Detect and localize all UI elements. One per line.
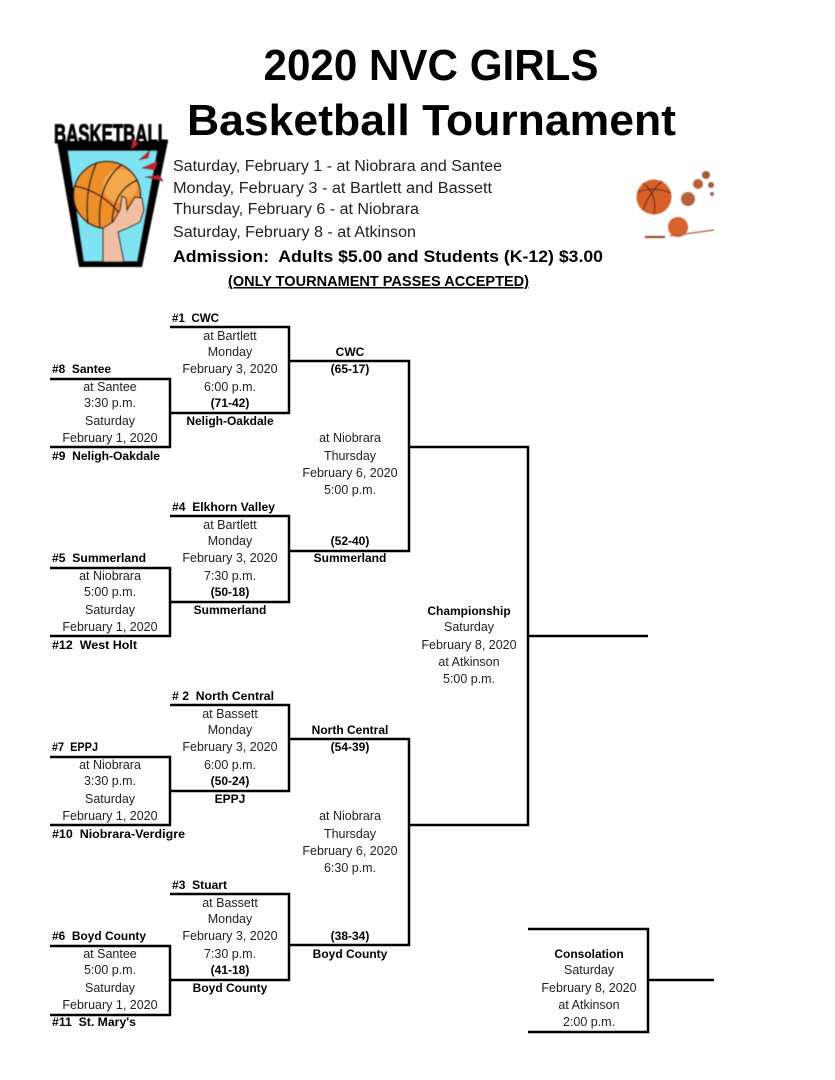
bracket: quarterfinal match CWC vs Neligh-Oakdale: (71-42) bbox=[211, 396, 249, 410]
bracket: quarterfinal match Stuart vs Boyd County: February 3, 2020 bbox=[182, 929, 278, 943]
bracket: quarterfinal match North Central vs EPPJ: 6:00 p.m. bbox=[204, 758, 256, 772]
bracket: first round match Santee vs Neligh-Oakdale: at Santee bbox=[83, 380, 137, 394]
bracket: championship: Championship bbox=[427, 604, 511, 618]
schedule text: Thursday, February 6 - at Niobrara bbox=[173, 201, 419, 218]
bracket: quarterfinal match CWC vs Neligh-Oakdale bbox=[170, 311, 289, 428]
bracket: semifinal North Central vs Boyd County: Thursday bbox=[324, 827, 377, 841]
bracket: quarterfinal match Elkhorn Valley vs Summerland: Monday bbox=[208, 534, 253, 548]
bracket: first round match EPPJ vs Niobrara-Verdigre bbox=[50, 740, 185, 841]
bracket: championship: February 8, 2020 bbox=[421, 638, 517, 652]
bracket: championship: Saturday bbox=[444, 620, 495, 634]
bracket: semifinal North Central vs Boyd County: North Central bbox=[312, 723, 388, 737]
icon: bouncing basketballs bbox=[636, 171, 714, 237]
bracket: quarterfinal match CWC vs Neligh-Oakdale: #1 CWC bbox=[172, 311, 219, 325]
bracket: semifinal CWC vs Summerland: CWC bbox=[336, 345, 365, 359]
bracket: quarterfinal match North Central vs EPPJ: (50-24) bbox=[211, 774, 249, 788]
bracket: semifinal North Central vs Boyd County: (38-34) bbox=[331, 929, 369, 943]
bracket: first round match Summerland vs West Holt: #12 West Holt bbox=[52, 638, 137, 652]
bracket: quarterfinal match North Central vs EPPJ: Monday bbox=[208, 723, 253, 737]
bracket: quarterfinal match North Central vs EPPJ bbox=[170, 689, 289, 806]
bracket: quarterfinal match CWC vs Neligh-Oakdale: February 3, 2020 bbox=[182, 362, 278, 376]
bracket: quarterfinal match Stuart vs Boyd County: 7:30 p.m. bbox=[204, 947, 256, 961]
bracket: first round match Santee vs Neligh-Oakdale: #9 Neligh-Oakdale bbox=[52, 449, 160, 463]
bracket: first round match Boyd County vs St. Mary's: February 1, 2020 bbox=[62, 998, 158, 1012]
bracket: first round match EPPJ vs Niobrara-Verdigre: Saturday bbox=[85, 792, 136, 806]
bracket: quarterfinal match CWC vs Neligh-Oakdale: Neligh-Oakdale bbox=[186, 414, 274, 428]
bracket: consolation: at Atkinson bbox=[558, 998, 620, 1012]
bracket: quarterfinal match Elkhorn Valley vs Summerland: (50-18) bbox=[211, 585, 249, 599]
bracket: semifinal North Central vs Boyd County: 6:30 p.m. bbox=[324, 861, 376, 875]
bracket: semifinal CWC vs Summerland: (52-40) bbox=[331, 534, 369, 548]
admission text: Admission: Adults $5.00 and Students (K-12) $3.00 bbox=[173, 247, 603, 266]
bracket: quarterfinal match Elkhorn Valley vs Summerland: at Bartlett bbox=[203, 518, 257, 532]
bracket: first round match Boyd County vs St. Mary's: #11 St. Mary's bbox=[52, 1015, 136, 1029]
bracket: first round match Summerland vs West Holt: at Niobrara bbox=[79, 569, 141, 583]
icon: basketball logo: BASKETBALL bbox=[54, 119, 168, 149]
bracket: quarterfinal match Elkhorn Valley vs Summerland bbox=[170, 500, 289, 617]
title: 2020 NVC GIRLS bbox=[264, 41, 598, 90]
bracket: first round match Summerland vs West Holt: February 1, 2020 bbox=[62, 620, 158, 634]
bracket: first round match Summerland vs West Holt: 5:00 p.m. bbox=[84, 585, 136, 599]
bracket: first round match EPPJ vs Niobrara-Verdigre: at Niobrara bbox=[79, 758, 141, 772]
bracket: quarterfinal match Stuart vs Boyd County bbox=[170, 878, 289, 995]
bracket: first round match Santee vs Neligh-Oakdale bbox=[50, 362, 170, 463]
title: Basketball Tournament bbox=[187, 96, 676, 145]
bracket: championship: 5:00 p.m. bbox=[443, 672, 495, 686]
schedule text: Saturday, February 8 - at Atkinson bbox=[173, 224, 416, 241]
bracket: quarterfinal match North Central vs EPPJ: # 2 North Central bbox=[172, 689, 274, 703]
bracket: quarterfinal match North Central vs EPPJ: EPPJ bbox=[215, 792, 245, 806]
bracket: semifinal CWC vs Summerland: Summerland bbox=[314, 551, 386, 565]
bracket: first round match Boyd County vs St. Mary's: 5:00 p.m. bbox=[84, 963, 136, 977]
icon: basketball logo bbox=[54, 119, 168, 267]
bracket: championship bbox=[409, 447, 648, 825]
bracket: quarterfinal match Stuart vs Boyd County: at Bassett bbox=[202, 896, 258, 910]
bracket: quarterfinal match North Central vs EPPJ: February 3, 2020 bbox=[182, 740, 278, 754]
bracket: first round match Santee vs Neligh-Oakdale: 3:30 p.m. bbox=[84, 396, 136, 410]
bracket: quarterfinal match North Central vs EPPJ: at Bassett bbox=[202, 707, 258, 721]
bracket: consolation: 2:00 p.m. bbox=[563, 1015, 615, 1029]
bracket: quarterfinal match CWC vs Neligh-Oakdale: at Bartlett bbox=[203, 329, 257, 343]
bracket: first round match EPPJ vs Niobrara-Verdigre: February 1, 2020 bbox=[62, 809, 158, 823]
bracket: first round match EPPJ vs Niobrara-Verdigre: 3:30 p.m. bbox=[84, 774, 136, 788]
bracket: first round match Boyd County vs St. Mary's: at Santee bbox=[83, 947, 137, 961]
bracket: semifinal CWC vs Summerland bbox=[289, 345, 409, 565]
bracket: quarterfinal match Stuart vs Boyd County: Monday bbox=[208, 912, 253, 926]
bracket: consolation: Consolation bbox=[554, 947, 624, 961]
bracket: first round match Santee vs Neligh-Oakdale: February 1, 2020 bbox=[62, 431, 158, 445]
bracket: first round match Summerland vs West Holt: Saturday bbox=[85, 603, 136, 617]
bracket: quarterfinal match Elkhorn Valley vs Summerland: February 3, 2020 bbox=[182, 551, 278, 565]
bracket: consolation bbox=[528, 929, 714, 1032]
bracket: semifinal North Central vs Boyd County: Boyd County bbox=[313, 947, 388, 961]
bracket: championship: at Atkinson bbox=[438, 655, 500, 669]
schedule text bbox=[173, 158, 502, 241]
bracket: semifinal CWC vs Summerland: February 6, 2020 bbox=[302, 466, 398, 480]
bracket: first round match Summerland vs West Holt: #5 Summerland bbox=[52, 551, 146, 565]
passes notice: (ONLY TOURNAMENT PASSES ACCEPTED) bbox=[228, 273, 529, 290]
bracket: first round match Santee vs Neligh-Oakdale: #8 Santee bbox=[52, 362, 111, 376]
bracket: semifinal CWC vs Summerland: Thursday bbox=[324, 449, 377, 463]
bracket: first round match Boyd County vs St. Mary's bbox=[50, 929, 170, 1029]
bracket: first round match EPPJ vs Niobrara-Verdigre: #7 EPPJ bbox=[52, 740, 98, 754]
bracket: quarterfinal match Elkhorn Valley vs Summerland: Summerland bbox=[194, 603, 266, 617]
bracket: quarterfinal match Elkhorn Valley vs Summerland: #4 Elkhorn Valley bbox=[172, 500, 275, 514]
bracket: semifinal CWC vs Summerland: at Niobrara bbox=[319, 431, 381, 445]
bracket: semifinal North Central vs Boyd County: (54-39) bbox=[331, 740, 369, 754]
bracket: consolation: February 8, 2020 bbox=[541, 981, 637, 995]
schedule text: Monday, February 3 - at Bartlett and Bassett bbox=[173, 180, 493, 197]
bracket: semifinal North Central vs Boyd County: February 6, 2020 bbox=[302, 844, 398, 858]
bracket: quarterfinal match CWC vs Neligh-Oakdale: 6:00 p.m. bbox=[204, 380, 256, 394]
bracket: quarterfinal match Stuart vs Boyd County: Boyd County bbox=[193, 981, 268, 995]
bracket: quarterfinal match Stuart vs Boyd County: (41-18) bbox=[211, 963, 249, 977]
bracket: first round match Santee vs Neligh-Oakdale: Saturday bbox=[85, 414, 136, 428]
bracket: first round match Boyd County vs St. Mary's: Saturday bbox=[85, 981, 136, 995]
bracket: consolation: Saturday bbox=[564, 963, 615, 977]
schedule text: Saturday, February 1 - at Niobrara and Santee bbox=[173, 158, 502, 175]
title bbox=[187, 41, 676, 145]
bracket: semifinal CWC vs Summerland: 5:00 p.m. bbox=[324, 483, 376, 497]
bracket: semifinal North Central vs Boyd County: at Niobrara bbox=[319, 809, 381, 823]
bracket: first round match Summerland vs West Holt bbox=[50, 551, 170, 652]
bracket: quarterfinal match Elkhorn Valley vs Summerland: 7:30 p.m. bbox=[204, 569, 256, 583]
bracket: first round match Boyd County vs St. Mary's: #6 Boyd County bbox=[52, 929, 146, 943]
bracket: semifinal CWC vs Summerland: (65-17) bbox=[331, 362, 369, 376]
bracket: quarterfinal match Stuart vs Boyd County: #3 Stuart bbox=[172, 878, 227, 892]
bracket: semifinal North Central vs Boyd County bbox=[289, 723, 409, 961]
bracket: first round match EPPJ vs Niobrara-Verdigre: #10 Niobrara-Verdigre bbox=[52, 827, 185, 841]
bracket: quarterfinal match CWC vs Neligh-Oakdale: Monday bbox=[208, 345, 253, 359]
